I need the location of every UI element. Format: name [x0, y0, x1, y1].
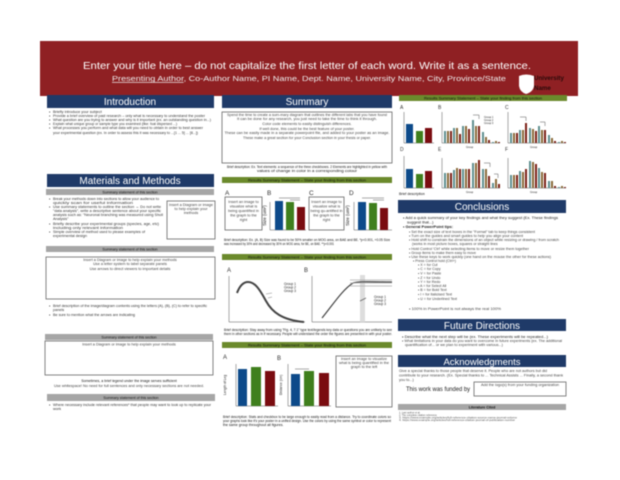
panel: conclusions: • Y = for Redo: [418, 280, 440, 284]
panel: summary: Brief description: Ex. Text elements: a sequence of the three checkboxes. 2 Elements are highlighted in yellow with: [227, 165, 387, 169]
panel: future directions: quantification of... or we plan to experiment with various...): [405, 343, 504, 347]
icon: university logo: Name: [534, 85, 551, 92]
panel: results three: [222, 342, 392, 427]
bar chart A: [404, 112, 434, 143]
panel: introduction: Briefly introduce your subject: [53, 110, 103, 114]
diagram placeholder: to help explain your: [175, 207, 208, 211]
line chart A: Group 3: [284, 289, 296, 293]
panel: results four: F: [505, 147, 508, 153]
panel: results four: Results Summary Statement – State your finding from this section: [424, 96, 542, 100]
panel: methods section four: •: [49, 403, 51, 407]
panel: materials and methods: Break your methods down into sections to allow your audience to: [53, 197, 159, 201]
panel: results one: C: [309, 190, 314, 197]
image placeholder A: being quantified in: [228, 209, 259, 213]
panel: future directions: [398, 319, 566, 347]
panel: summary: values of change in color in a corresponding colour: [257, 169, 358, 173]
panel: acknowledgments: Acknowledgments: [443, 357, 521, 368]
panel: results four: C: [505, 105, 509, 111]
panel: results one: [222, 177, 392, 246]
bar chart B: Distance (cm): [279, 375, 283, 395]
panel: future directions: • Describe what the next step will be (ex. These experiments will be repeated...): [402, 335, 549, 339]
panel: results four: D: [400, 147, 404, 153]
panel: acknowledgments: Give a special thanks to those people that deserve it. People who are not authors but did: [399, 369, 547, 373]
panel: methods section four: Where necessary include relevant references* that people may want to look up to replicate your: [53, 403, 212, 407]
panel: materials and methods: •: [49, 222, 51, 226]
panel: literature cited: 3. https://www.example.org/articles/full-reference-citation-source-name-journal-volume: [399, 416, 518, 420]
bar chart A: [223, 364, 278, 406]
panel: conclusions: • B = for Bold Text: [418, 288, 447, 292]
panel: conclusions: • A = for Select All: [418, 284, 447, 288]
panel: acknowledgments: you to...): [399, 378, 415, 382]
line chart A: [229, 276, 305, 322]
grouped bar chart E: Group: [466, 190, 474, 194]
image placeholder C: right: [323, 218, 331, 222]
panel: materials and methods: Briefly describe your experimental groups (species, age, etc): [53, 222, 160, 226]
line chart A: Group 2: [284, 286, 296, 290]
image placeholder C: Insert an image to: [311, 200, 342, 204]
panel: introduction: [47, 95, 214, 135]
panel: materials and methods: Simple overview of method used to please examples of: [53, 230, 146, 234]
icon: university logo: [519, 74, 564, 94]
panel: conclusions: (works in most picture boxes, squares or straight lines: [412, 242, 498, 246]
panel: methods section three: Insert a Diagram or image to help explain your methods: [82, 342, 176, 346]
image placeholder: graph to the left: [351, 365, 378, 369]
bar chart D: [404, 156, 434, 188]
panel: methods section three: Summary statement of this section: [101, 336, 157, 340]
panel: conclusions: • I = for Italicised Text: [418, 292, 452, 296]
panel: methods section four: [47, 394, 215, 411]
panel: materials and methods: Summary statement of this section: [102, 190, 158, 194]
panel: literature cited: [398, 404, 566, 422]
line chart B: Group 1: [374, 295, 386, 299]
grouped bar chart B: Group 3: [484, 121, 494, 125]
panel: results two: A: [227, 268, 231, 274]
panel: materials and methods: [46, 174, 215, 239]
panel: introduction: Explain what unique group or sample type you examined (like: foal dispersed ...): [53, 122, 178, 126]
panel: literature cited: 1. Last author et al.: [399, 412, 421, 414]
panel: results one: Brief description: Ex. (A, B) Size was found to be 50% smaller on MOG area, on BAE and BE. *p<0.001, +0.05 Size: [224, 238, 390, 242]
panel: methods section three: Use whitespace! No need for full sentences and only necessary sections are not needed.: [54, 384, 204, 388]
panel: results two: B: [304, 268, 308, 274]
panel: results one: A: [225, 190, 230, 197]
panel: summary: These can be easily made in a separate powerpoint file, and added to your poster as an image.: [224, 131, 390, 135]
panel: results two: them in other sections as in if necessary. People will understand the order the figures are presented in with your poster.: [224, 332, 392, 336]
panel: summary: Summary: [286, 97, 328, 108]
author line: Presenting Author , Co-Author Name, PI Name, Dept. Name, University Name, City, Province/State: [112, 74, 506, 83]
grouped bar chart F: Group: [530, 190, 538, 194]
grouped bar chart E: [442, 158, 500, 194]
panel: results three: your graphs look like it's your poster in a unified design. Use the colors by using the same symbol or color to represent: [223, 419, 391, 423]
panel: results four: A: [400, 105, 404, 111]
image placeholder A: visualize what is: [230, 204, 257, 208]
funding logo box: [474, 382, 566, 396]
panel: conclusions: • X = for Cut: [418, 263, 438, 267]
panel: materials and methods: quickly scan for useful information: [53, 201, 133, 205]
panel: results three: A: [223, 355, 227, 361]
panel: methods section two: Insert a Diagram or image to help explain your methods: [83, 258, 177, 262]
panel: conclusions: • U = for Underlined Text: [418, 297, 457, 301]
grouped bar chart C: Group: [530, 145, 538, 149]
panel: results three: the same group throughout all figures.: [223, 423, 284, 427]
image placeholder C: visualize what is: [313, 204, 340, 208]
grouped bar chart B: Group: [466, 145, 474, 149]
panel: literature cited: 4. https://www.example.org/articles/full-reference-citation-journal-of-publication-number: [399, 419, 515, 422]
bar chart A: Length of Leg: [223, 375, 227, 395]
panel: methods section two: [46, 246, 215, 317]
panel: materials and methods: "data analysis", write a descriptive sentence about your specific: [53, 209, 161, 213]
funding statement: This work was funded by: [406, 387, 470, 393]
panel: conclusions: Conclusions: [455, 202, 509, 213]
image placeholder: [336, 356, 392, 407]
panel: conclusions: • General PowerPoint tips:: [403, 224, 453, 229]
panel: future directions: • What limitations in your data do you want to overcome in future experiments (ex. The additional: [402, 339, 562, 343]
panel: results one: Results Summary Statement – State your finding from this section: [248, 178, 366, 182]
panel: materials and methods: •: [49, 197, 51, 201]
panel: literature cited: Literature Cited: [469, 406, 495, 410]
panel: introduction: What processes you perform and what data will you need to obtain in order to best answer: [53, 126, 204, 130]
panel: materials and methods: Analysis": [53, 217, 69, 221]
panel: materials and methods: analysis such as: "Neuronal branching was measured using Sholl: [53, 213, 163, 217]
panel: summary: Spend the time to create a sum-mary diagram that outlines the different labs that you have found: [227, 113, 387, 117]
panel: results four: B: [438, 105, 442, 111]
panel: acknowledgments: contribute to your research. (Ex. Special thanks to ... Technical Assists ... Finally, a second thank: [399, 374, 563, 378]
panel: results three: Brief description: Stats and checkbox to be large enough to easily read from a distance. Try to coordinate colors so: [223, 415, 391, 419]
panel: conclusions: • Turn on the guides and smart guides to help you align your content: [409, 234, 523, 238]
panel: future directions: Future Directions: [444, 321, 520, 332]
panel: conclusions: [398, 200, 566, 311]
image placeholder A: the graph to the: [230, 214, 257, 218]
bar chart B: [262, 198, 306, 230]
panel: introduction: Introduction: [104, 97, 156, 108]
panel: conclusions: • Group items to make them easy to move: [409, 251, 476, 255]
image placeholder A: [225, 197, 262, 230]
panel: methods section two: Summary statement of this section: [102, 248, 158, 252]
panel: literature cited: 2. The complete citation reference: [399, 414, 437, 417]
title banner: [40, 41, 578, 96]
panel: results four: [399, 95, 567, 196]
panel: methods section two: Brief description of the image/diagram contents using the letters (A), (B), (C) to refer to specific: [53, 304, 207, 308]
panel: introduction: your experimental question (ex. In order to assess this it was necessary to ...[1 ... 5] ... [8...]): [53, 131, 199, 135]
bar chart B: [279, 364, 331, 406]
panel: introduction: •: [49, 110, 51, 114]
image placeholder A: Insert an image to: [228, 200, 259, 204]
image placeholder: what is being quantified in the: [339, 361, 389, 365]
panel: methods section three: [45, 334, 213, 388]
panel: introduction: •: [49, 122, 51, 126]
panel: introduction: •: [49, 114, 51, 118]
panel: conclusions: • Press Control hold (Ctrl+): [413, 259, 456, 263]
panel: methods section two: Use a letter system to label separate panels: [93, 262, 167, 266]
panel: materials and methods: Use summary statements to outline the section → Do not write: [53, 205, 161, 209]
panel: introduction: What question are you trying to answer and why is it important (ex. an outstanding question in...): [53, 118, 212, 122]
panel: introduction: Provide a brief overview of past research – only what is necessary to understand the poster: [53, 114, 206, 118]
panel: materials and methods: including only relevant information: [53, 226, 123, 230]
panel: methods section three: Sometimes, a brief legend under the image serves sufficient: [81, 379, 177, 383]
image placeholder C: the graph to the: [313, 214, 340, 218]
bar chart D: [345, 198, 392, 230]
panel: summary: Color code elements to easily distinguish differences.: [262, 122, 352, 126]
diagram placeholder: methods: [184, 211, 198, 215]
panel: conclusions: • Hold Control 'Ctrl' while selecting items to move or resize them together: [409, 247, 530, 251]
panel: conclusions: • Use these keys to work quickly (one hand on the mouse the other for these actions): [409, 255, 551, 259]
panel: conclusions: • Set the exact size of text boxes in the "Format" tab to keep things consistent: [409, 230, 535, 234]
panel: results three: Results Summary Statement – State your finding from this section: [248, 344, 366, 348]
funding logo box: Add the logo(s) from your funding organization: [481, 383, 559, 387]
panel: summary: If well done, this could be the best feature of your poster.: [259, 127, 355, 131]
panel: materials and methods: Materials and Methods: [79, 176, 181, 187]
panel: methods section four: work: [53, 407, 61, 411]
bar chart D: Size (um²): [345, 205, 350, 226]
panel: methods section four: Summary statement of this section: [103, 396, 159, 400]
diagram placeholder: [167, 201, 215, 239]
grouped bar chart F: [508, 158, 566, 194]
panel: results four: E: [438, 147, 442, 153]
grouped bar chart B: [442, 112, 500, 149]
panel: conclusions: • C = for Copy: [418, 267, 441, 271]
icon: university logo: University: [534, 75, 564, 82]
panel: summary: [222, 95, 392, 173]
panel: results one: D: [349, 190, 354, 197]
panel: materials and methods: •: [49, 230, 51, 234]
panel: conclusions: • Add a quick summary of your key findings and what they suggest (Ex. These findings: [403, 215, 558, 220]
panel: conclusions: • V = for Paste: [418, 272, 441, 276]
line chart B: Group 3: [374, 302, 386, 306]
panel: introduction: •: [49, 126, 51, 130]
image placeholder: Insert an image to visualize: [341, 357, 387, 361]
panel: summary: It can be done for any research, you just need to take the time to think it through.: [237, 117, 377, 121]
panel: methods section two: Be sure to mention what the arrows are indicating: [53, 313, 135, 317]
line chart B: Group 2: [374, 298, 386, 302]
panel: results two: [222, 254, 392, 336]
panel: results one: was increased by 30% and decreased by 30% on MOG area, for BE, on BAE. **p<0.001: [224, 242, 334, 246]
panel: results one: B: [267, 190, 271, 197]
bar chart B: Size (um²): [262, 205, 267, 226]
panel: conclusions: • 100% in PowerPoint is not always the real 100%: [409, 307, 502, 311]
line chart B: [312, 275, 392, 322]
grouped bar chart B: Group 2: [484, 118, 494, 122]
panel: introduction: •: [49, 118, 51, 122]
panel: conclusions: suggest that...): [407, 220, 434, 224]
panel: materials and methods: •: [49, 205, 51, 209]
panel: methods section two: Use arrows to direct viewers to important details: [90, 267, 171, 271]
diagram placeholder: Insert a Diagram or image: [169, 203, 213, 207]
title: Enter your title here – do not capitalize the first letter of each word. Write it as a sentence.: [83, 60, 531, 72]
image placeholder C: [309, 197, 344, 230]
panel: results four: Brief description: [399, 192, 425, 196]
line chart A: Group 1: [284, 282, 296, 286]
grouped bar chart B: Group 1: [484, 115, 494, 119]
panel: methods section two: •: [49, 304, 51, 308]
panel: summary: These make a great section for your Conclusion section in your thesis or paper.: [243, 136, 371, 140]
panel: results two: Brief description: Stay away from using "Fig. 4, 7.1" type text/legends key data or questions you are unlikely to see: [224, 328, 392, 332]
panel: methods section two: •: [49, 313, 51, 317]
image placeholder A: right: [240, 218, 248, 222]
image placeholder C: being qu-antified in: [310, 209, 343, 213]
panel: conclusions: • Hold shift to constrain the dimensions of an object while resizing or drawing / from scratch: [409, 238, 559, 242]
panel: results two: Results Summary Statement – State your finding from this section: [248, 256, 366, 260]
panel: results three: B: [277, 356, 281, 362]
panel: acknowledgments: [398, 355, 566, 396]
panel: conclusions: • Z = for Undo: [418, 276, 440, 280]
panel: materials and methods: experimental design: [53, 234, 87, 238]
grouped bar chart C: [508, 112, 566, 149]
panel: methods section two: panels: [53, 308, 64, 312]
